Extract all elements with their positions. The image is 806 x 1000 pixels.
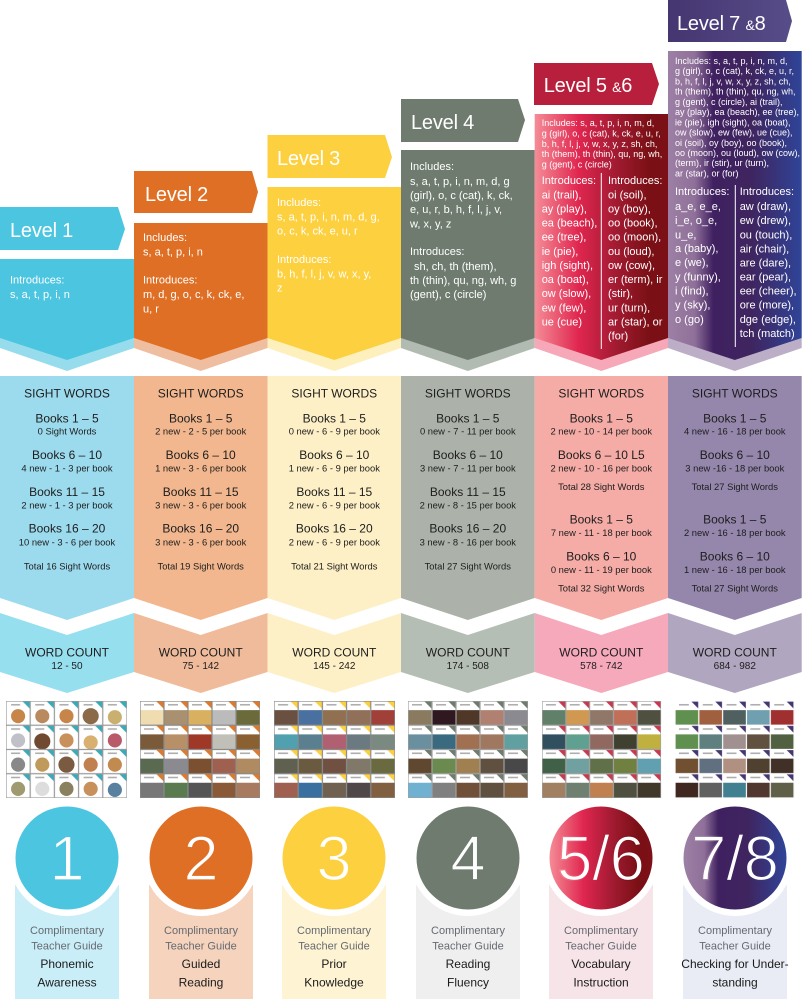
sight words: level 3: 2 new - 6 - 9 per book [289,499,380,510]
level 5-6 introduces column one [542,175,597,328]
guide text 4 [431,925,505,990]
level 7-8 introduces column one: y (sky), [675,300,710,312]
guide text 3: Complimentary [297,925,371,937]
level 5-6 introduces column two: Introduces: [608,175,662,187]
level 5-6 introduces column one: oa (boat), [542,274,589,286]
guide text 3: Knowledge [304,976,364,990]
word count: level 3: 145 - 242 [313,661,356,672]
sight words: level 3 [268,376,401,620]
sight words: level 4 [401,376,535,620]
word count: level 1 [0,613,134,693]
sight words: level 7 and 8: Books 6 – 10 [700,448,770,462]
guide text 2: Reading [179,976,223,990]
level 4 phonics text [409,161,516,301]
level 4 phonics text: w, x, y, z [409,218,451,230]
level 4 phonics text: th (thin), qu, ng, wh, g [410,275,516,287]
level 3 phonics text: z [277,282,282,294]
level 4 phonics text: s, a, t, p, i, n, m, d, g [410,176,510,188]
sight words: level 7 and 8: 1 new - 16 - 18 per book [684,564,786,575]
level 7-8 includes text: b, h, f, l, j, v, w, x, y, z, sh, ch, [675,76,791,86]
guide text 3 [297,925,371,990]
guide text 5/6 [564,925,638,990]
panel: level 5 and 6 [534,63,668,371]
level 5-6 includes text: g (girl), o, c (cat), k, ck, e, u, r, [542,128,661,138]
level 1 phonics text: s, a, t, p, i, n [10,289,70,301]
level 4 header: Level 4 [411,112,474,134]
level 4 phonics text: e, u, r, b, h, f, l, j, v, [410,204,502,216]
book covers: level 1 [6,701,127,798]
level 7-8 introduces column two: eer (cheer), [740,286,797,298]
panel: level 7 and 8 [668,0,806,371]
teacher guide: level 1 [9,800,125,999]
sight words: level 2: 2 new - 2 - 5 per book [155,426,247,437]
teacher guide: level 5 and 6 [543,800,659,999]
sight words: level 2 [134,376,268,620]
sight words: level 3: SIGHT WORDS [291,386,377,400]
teacher guide: level 3 [276,800,392,999]
sight words: level 5 and 6: 7 new - 11 - 18 per book [551,527,652,538]
level 7-8 introduces column two: tch (match) [740,328,795,340]
word count: level 2: WORD COUNT [159,645,243,659]
level 5-6 header [534,63,659,105]
level 4 phonics text: (gent), c (circle) [410,289,486,301]
sight words: level 5 and 6: 2 new - 10 - 14 per book [550,426,652,437]
sight words: level 4: 0 new - 7 - 11 per book [420,426,516,437]
level 2 phonics text: s, a, t, p, i, n [143,246,203,258]
guide text 7/8 [681,925,789,990]
level 7-8 includes text: oi (soil), oy (boy), oo (book), [675,138,787,148]
sight words: level 3: 0 new - 6 - 9 per book [289,426,380,437]
level 4 phonics text: (girl), o, c (cat), k, ck, [410,190,513,202]
level 5-6 introduces column two: (for) [608,330,628,342]
guide text 3: Prior [321,957,347,971]
level 7-8 introduces column two: ore (more), [740,300,794,312]
level 5-6 introduces column two: ow (cow), [608,260,655,272]
level 5-6 header: Level 5 &6 [544,75,632,97]
level 7-8 includes text: g (gent), c (circle), ai (trail), [675,97,783,107]
level 7-8 introduces column two: aw (draw), [740,201,791,213]
level 4 chevron band [401,338,535,371]
sight words: level 5 and 6: Total 32 Sight Words [558,582,645,593]
guide text 1: Teacher Guide [31,940,103,952]
level 5-6 introduces column two: oi (soil), [608,190,647,202]
level 3 header: Level 3 [277,148,340,170]
word count: level 2: 75 - 142 [182,661,219,672]
word count: level 5 and 6: WORD COUNT [559,645,644,659]
level 7-8 introduces column one: i_e, o_e, [675,215,717,227]
level 7-8 introduces column one: o (go) [675,314,704,326]
guide text 4: Teacher Guide [432,940,504,952]
guide text 2: Teacher Guide [165,940,237,952]
panel: level 3 [268,135,401,371]
sight words: level 3: Total 21 Sight Words [291,560,378,571]
number circle 3 [282,806,386,910]
level 2 header: Level 2 [145,184,208,206]
guide text 1: Awareness [37,976,97,990]
sight words: level 1: Books 11 – 15 [29,485,105,499]
level 7-8 introduces column two: Introduces: [740,186,794,198]
guide text 7/8: Checking for Under- [681,957,789,971]
level 7-8 includes text: ar (star), or (for) [675,168,739,178]
sight words: level 7 and 8: Total 27 Sight Words [692,582,778,593]
level 1 body panel [0,259,134,360]
sight words: level 7 and 8: Total 27 Sight Words [692,481,778,492]
sight words: level 7 and 8: 4 new - 16 - 18 per book [684,426,786,437]
level 3 phonics text: s, a, t, p, i, n, m, d, g, [277,212,380,224]
sight words: level 3: Books 6 – 10 [299,448,370,462]
sight words: level 5 and 6: Books 6 – 10 [566,549,637,563]
guide text 7/8: Complimentary [698,925,772,937]
guide text 5/6: Teacher Guide [565,940,637,952]
sight words: level 3: 2 new - 6 - 9 per book [289,536,380,547]
level 2 body panel [134,223,268,360]
level 5-6 includes text: Includes: s, a, t, p, i, n, m, d, [542,118,654,128]
level 1 header [0,207,125,250]
level 5-6 body panel [535,114,668,360]
sight words: level 2: 3 new - 3 - 6 per book [155,499,247,510]
sight words: level 2: 1 new - 3 - 6 per book [155,463,247,474]
guide text 5/6: Vocabulary [571,957,631,971]
level 7-8 introduces column one: i (find), [675,286,709,298]
sight words: level 2: Books 11 – 15 [163,485,239,499]
sight words: level 1: Books 1 – 5 [35,411,99,425]
sight words: level 3: Books 11 – 15 [296,485,373,499]
word count: level 4: WORD COUNT [426,645,510,659]
sight words: level 2: Books 16 – 20 [162,522,239,536]
level 2 header [134,171,258,213]
level 4 body panel [401,150,535,360]
number circle 2 [150,806,252,910]
panel: level 4 [401,99,535,371]
level 1 header: Level 1 [10,220,73,242]
level 4 phonics text: Includes: [410,161,454,173]
sight words: level 1 [0,376,134,620]
sight words: level 5 and 6: 2 new - 10 - 16 per book [550,463,652,474]
guide text 1 [30,925,104,990]
level 7-8 introduces column two: ew (drew), [740,215,791,227]
level 5-6 introduces column one: Introduces: [542,175,596,187]
sight words: level 2: SIGHT WORDS [158,386,244,400]
book covers: level 2 [140,701,260,798]
guide text 7/8: standing [712,976,758,990]
level 5-6 introduces column one: ue (cue) [542,316,582,328]
sight words: level 2: 3 new - 3 - 6 per book [155,536,247,547]
level 7-8 introduces column two [740,186,797,340]
level 3 body panel [268,187,401,360]
sight words: level 1: Books 6 – 10 [32,448,102,462]
word count: level 5 and 6: 578 - 742 [580,661,623,672]
sight words: level 7 and 8: 3 new -16 - 18 per book [685,463,785,474]
sight words: level 5 and 6 [535,376,668,620]
level 4 phonics text: Introduces: [410,246,464,258]
sight words: level 4: Books 6 – 10 [433,448,503,462]
level 2 phonics text: Introduces: [143,274,197,286]
level 5-6 includes text [542,118,662,169]
level 3 header [268,135,392,178]
sight words: level 2: Books 6 – 10 [166,448,236,462]
panel: level 2 [134,171,268,371]
guide text 2: Complimentary [164,925,238,937]
level 4 header [401,99,525,142]
book covers: level 5 and 6 [542,701,661,798]
guide text 4: Complimentary [431,925,505,937]
level 5-6 chevron band [535,338,668,371]
sight words: level 3: Books 16 – 20 [296,522,373,536]
level 5-6 introduces column one: ew (few), [542,302,586,314]
sight words: level 4: Books 1 – 5 [436,411,500,425]
word count: level 5 and 6 [535,613,668,693]
teacher guide: level 7 and 8 [677,800,793,999]
sight words: level 7 and 8: Books 6 – 10 [700,549,770,563]
guide text 2: Guided [182,957,220,971]
level 2 phonics text: u, r [143,303,159,315]
level 3 chevron band [268,338,401,371]
number circle 3: 3 [316,824,352,894]
sight words: level 4: SIGHT WORDS [425,386,511,400]
sight words: level 5 and 6: SIGHT WORDS [558,386,644,400]
sight words: level 3: 1 new - 6 - 9 per book [289,463,380,474]
word count: level 7 and 8 [668,613,802,693]
level 2 phonics text: Includes: [143,232,187,244]
level 1 chevron band [0,338,134,371]
level 7-8 includes text: th (them), th (thin), qu, ng, wh, [675,86,796,96]
sight words: level 1: 4 new - 1 - 3 per book [21,463,113,474]
level 3 phonics text: Introduces: [277,254,331,266]
level 2 phonics text [143,232,244,315]
level 7-8 introduces column one: y (funny), [675,272,721,284]
sight words: level 4: 3 new - 7 - 11 per book [420,463,516,474]
level 5-6 introduces column one: igh (sight), [542,260,593,272]
sight words: level 1: 0 Sight Words [38,426,97,437]
book covers: level 4 [408,701,528,798]
level 7-8 introduces column two: ou (touch), [740,229,792,241]
level 5-6 introduces column one: ie (pie), [542,246,578,258]
level 5-6 includes text: b, h, f, l, j, v, w, x, y, z, sh, ch, [542,139,657,149]
level 7-8 introduces column one: e (we), [675,257,709,269]
number circle 7/8 [684,806,786,910]
level 5-6 introduces column two: oy (boy), [608,204,651,216]
level 5-6 introduces column two: er (term), ir [608,274,663,286]
word count: level 7 and 8: WORD COUNT [693,645,777,659]
panel: level 1 [0,207,134,371]
level 7-8 introduces column one: a_e, e_e, [675,201,721,213]
guide text 5/6: Instruction [573,976,629,990]
sight words: level 7 and 8: Books 1 – 5 [703,411,767,425]
level 3 phonics text: b, h, f, l, j, v, w, x, y, [277,268,371,280]
level 5-6 introduces column two: oo (book), [608,218,658,230]
level 2 chevron band [134,338,268,371]
guide text 1: Phonemic [40,957,94,971]
number circle 2: 2 [183,824,219,894]
sight words: level 7 and 8: SIGHT WORDS [692,386,778,400]
word count: level 3: WORD COUNT [292,645,377,659]
number circle 4: 4 [450,824,486,894]
teacher guide: level 4 [410,800,526,999]
level 7-8 introduces column one: a (baby), [675,243,718,255]
level 3 phonics text: o, c, k, ck, e, u, r [277,226,358,238]
sight words: level 7 and 8: Books 1 – 5 [703,512,767,526]
sight words: level 4: 2 new - 8 - 15 per book [420,499,516,510]
guide text 2 [164,925,238,990]
sight words: level 5 and 6: Total 28 Sight Words [558,481,645,492]
sight words: level 4: Books 11 – 15 [430,485,506,499]
teacher guide: level 2 [143,800,259,999]
sight words: level 7 and 8: 2 new - 16 - 18 per book [684,527,786,538]
level 7-8 introduces column one [675,186,729,326]
level 3 phonics text: Includes: [277,197,321,209]
book covers: level 3 [274,701,395,798]
level 7-8 chevron band [668,338,802,371]
guide text 5/6: Complimentary [564,925,638,937]
level 5-6 includes text: g (gent), c (circle) [542,159,612,169]
level 5-6 introduces column two [608,175,663,342]
level 5-6 introduces column two: ur (turn), [608,302,650,314]
word count: level 1: 12 - 50 [51,661,83,672]
level 5-6 introduces column two: (stir), [608,288,633,300]
guide text 3: Teacher Guide [298,940,370,952]
sight words: level 3: Books 1 – 5 [303,411,366,425]
guide text 7/8: Teacher Guide [699,940,771,952]
level 7-8 introduces column one: Introduces: [675,186,729,198]
level 5-6 introduces column one: ay (play), [542,204,587,216]
sight words: level 5 and 6: Books 1 – 5 [570,512,633,526]
word count: level 3 [268,613,401,693]
sight words: level 4: Books 16 – 20 [429,522,506,536]
level 2 phonics text: m, d, g, o, c, k, ck, e, [143,289,244,301]
level 7-8 includes text: ay (play), ea (beach), ee (tree), [675,107,799,117]
level 5-6 introduces column two: ar (star), or [608,316,663,328]
sight words: level 1: SIGHT WORDS [24,386,110,400]
level 7-8 includes text: ie (pie), igh (sight), oa (boat), [675,117,791,127]
book covers: level 7 and 8 [675,701,794,798]
level 5-6 introduces column two: oo (moon), [608,232,661,244]
level 7-8 includes text: (term), ir (stir), ur (turn), [675,158,769,168]
level 7-8 introduces column two: are (dare), [740,257,791,269]
sight words: level 4: 3 new - 8 - 16 per book [420,536,516,547]
sight words: level 5 and 6: 0 new - 11 - 19 per book [551,564,652,575]
level 7-8 body panel [668,51,802,360]
level 7-8 header [668,0,792,42]
guide text 4: Reading [446,957,490,971]
number circle 1: 1 [49,824,85,894]
level 5-6 introduces column one: ai (trail), [542,190,581,202]
word count: level 1: WORD COUNT [25,645,110,659]
word count: level 2 [134,613,268,693]
number circle 7/8: 7/8 [691,824,779,894]
level 7-8 introduces column two: air (chair), [740,243,789,255]
level 5-6 introduces column one: ee (tree), [542,232,586,244]
number circle 1 [16,806,118,910]
level 7-8 includes text: Includes: s, a, t, p, i, n, m, d, [675,56,788,66]
sight words: level 7 and 8 [668,376,802,620]
sight words: level 5 and 6: Books 1 – 5 [570,411,633,425]
number circle 4 [416,806,520,910]
level 5-6 introduces column one: ea (beach), [542,218,597,230]
level 5-6 introduces column one: ow (slow), [542,288,591,300]
level 7-8 includes text: g (girl), o, c (cat), k, ck, e, u, r, [675,66,794,76]
sight words: level 4: Total 27 Sight Words [425,560,511,571]
sight words: level 1: 2 new - 1 - 3 per book [21,499,113,510]
sight words: level 1: 10 new - 3 - 6 per book [19,536,116,547]
number circle 5/6 [550,806,652,910]
level 7-8 introduces column one: u_e, [675,229,696,241]
level 5-6 includes text: th (them), th (thin), qu, ng, wh, [542,149,662,159]
level 1 phonics text [10,274,70,301]
sight words: level 1: Total 16 Sight Words [24,560,110,571]
level 7-8 includes text: oo (moon), ou (loud), ow (cow), e [675,148,806,158]
level 7-8 includes text: ow (slow), ew (few), ue (cue), [675,128,793,138]
word count: level 4 [401,613,535,693]
level 7-8 introduces column two: ear (pear), [740,272,791,284]
level 7-8 header: Level 7 &8 [677,13,766,35]
number circle 5/6: 5/6 [557,824,645,894]
word count: level 4: 174 - 508 [447,661,489,672]
guide text 1: Complimentary [30,925,104,937]
sight words: level 2: Books 1 – 5 [169,411,233,425]
level 7-8 introduces column two: dge (edge), [740,314,796,326]
level 7-8 includes text [675,56,806,178]
guide text 4: Fluency [447,976,489,990]
sight words: level 5 and 6: Books 6 – 10 L5 [558,448,645,462]
sight words: level 2: Total 19 Sight Words [158,560,244,571]
sight words: level 1: Books 16 – 20 [29,522,106,536]
level 1 phonics text: Introduces: [10,274,64,286]
level 4 phonics text: sh, ch, th (them), [414,261,497,273]
level 5-6 introduces column two: ou (loud), [608,246,654,258]
word count: level 7 and 8: 684 - 982 [714,661,756,672]
level 3 phonics text [277,197,380,294]
